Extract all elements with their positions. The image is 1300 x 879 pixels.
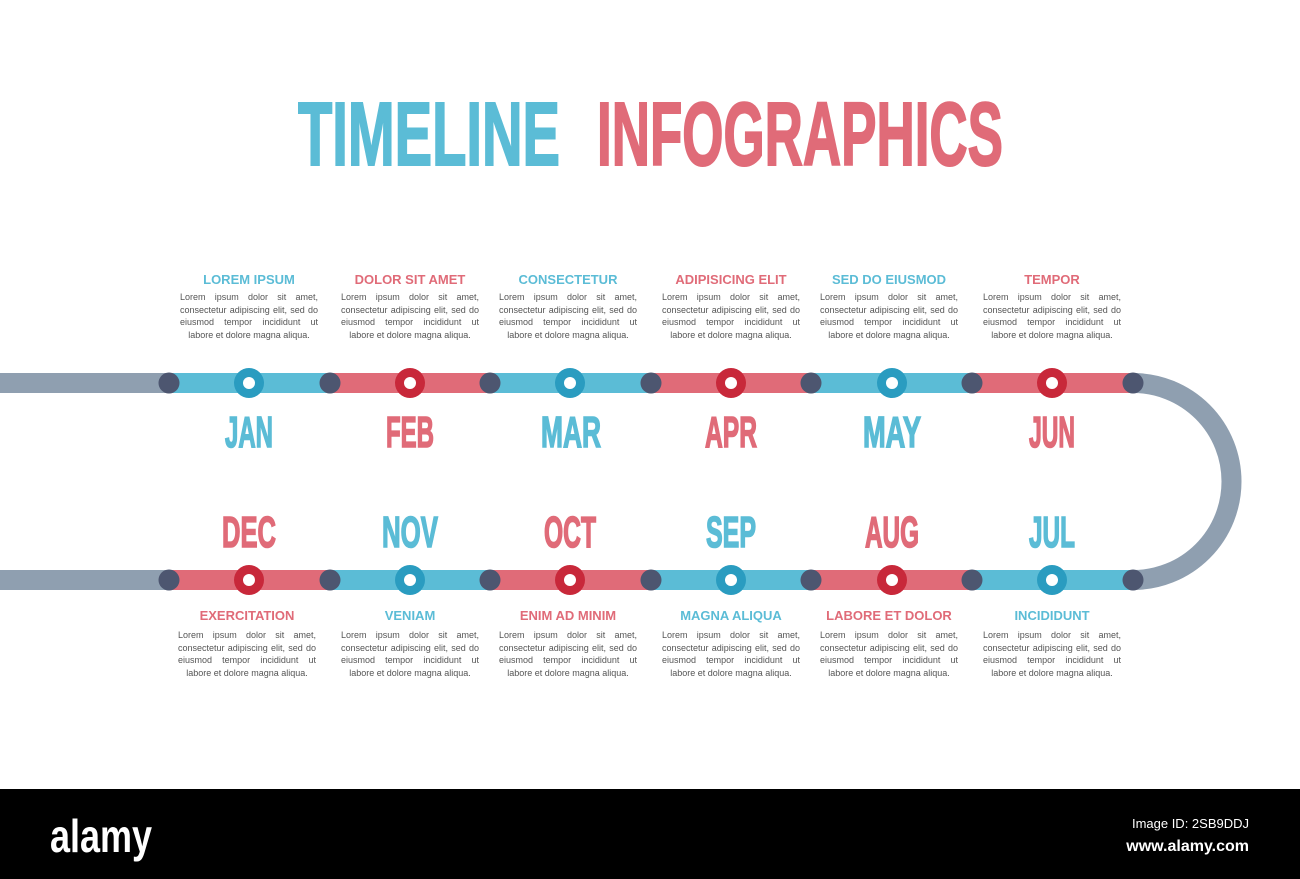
text: TEMPOR <box>1024 272 1080 287</box>
footer bar <box>0 789 1300 879</box>
text: VENIAM <box>385 608 435 623</box>
month labels: OCT <box>544 508 596 557</box>
text: Lorem ipsum dolor sit amet, consectetur adipiscing elit, sed do eiusmod tempor incididunt ut labore et dolore magna aliqua. <box>983 630 1121 678</box>
text: INCIDIDUNT <box>1014 608 1090 623</box>
title: TIMELINE <box>298 85 560 185</box>
text: LABORE ET DOLOR <box>826 608 952 623</box>
text: Lorem ipsum dolor sit amet, consectetur adipiscing elit, sed do eiusmod tempor incididunt ut labore et dolore magna aliqua. <box>180 292 318 340</box>
text: LOREM IPSUM <box>203 272 295 287</box>
top text blocks <box>180 272 1121 340</box>
month labels: AUG <box>865 508 919 557</box>
text: Lorem ipsum dolor sit amet, consectetur adipiscing elit, sed do eiusmod tempor incididunt ut labore et dolore magna aliqua. <box>178 630 316 678</box>
footer id: www.alamy.com <box>1125 838 1249 855</box>
text: EXERCITATION <box>200 608 294 623</box>
month labels: FEB <box>386 408 434 457</box>
text: Lorem ipsum dolor sit amet, consectetur adipiscing elit, sed do eiusmod tempor incididunt ut labore et dolore magna aliqua. <box>662 630 800 678</box>
joint dots <box>158 372 1144 590</box>
text: Lorem ipsum dolor sit amet, consectetur adipiscing elit, sed do eiusmod tempor incididunt ut labore et dolore magna aliqua. <box>499 292 637 340</box>
text: Lorem ipsum dolor sit amet, consectetur adipiscing elit, sed do eiusmod tempor incididunt ut labore et dolore magna aliqua. <box>820 292 958 340</box>
month labels: NOV <box>382 508 438 557</box>
month labels: JUN <box>1029 408 1075 457</box>
footer id <box>1125 816 1249 855</box>
month labels <box>222 408 1075 557</box>
text: SED DO EIUSMOD <box>832 272 946 287</box>
text: Lorem ipsum dolor sit amet, consectetur adipiscing elit, sed do eiusmod tempor incididunt ut labore et dolore magna aliqua. <box>341 630 479 678</box>
text: ADIPISICING ELIT <box>675 272 787 287</box>
text: MAGNA ALIQUA <box>680 608 782 623</box>
footer logo: alamy <box>50 810 152 862</box>
milestone markers <box>234 368 1067 595</box>
text: Lorem ipsum dolor sit amet, consectetur adipiscing elit, sed do eiusmod tempor incididunt ut labore et dolore magna aliqua. <box>820 630 958 678</box>
month labels: DEC <box>222 508 276 557</box>
text: DOLOR SIT AMET <box>355 272 465 287</box>
month labels: JAN <box>225 408 273 457</box>
month labels: JUL <box>1029 508 1075 557</box>
title <box>298 85 1003 185</box>
month labels: MAY <box>863 408 921 457</box>
text: Lorem ipsum dolor sit amet, consectetur adipiscing elit, sed do eiusmod tempor incididunt ut labore et dolore magna aliqua. <box>662 292 800 340</box>
track <box>0 383 1232 580</box>
text: Lorem ipsum dolor sit amet, consectetur adipiscing elit, sed do eiusmod tempor incididunt ut labore et dolore magna aliqua. <box>499 630 637 678</box>
month labels: APR <box>705 408 757 457</box>
text: ENIM AD MINIM <box>520 608 616 623</box>
footer id: Image ID: 2SB9DDJ <box>1132 816 1249 831</box>
title: INFOGRAPHICS <box>597 85 1003 185</box>
text: CONSECTETUR <box>519 272 617 287</box>
month labels: SEP <box>706 508 756 557</box>
text: Lorem ipsum dolor sit amet, consectetur adipiscing elit, sed do eiusmod tempor incididunt ut labore et dolore magna aliqua. <box>341 292 479 340</box>
bottom text blocks <box>178 608 1121 678</box>
month labels: MAR <box>541 408 601 457</box>
text: Lorem ipsum dolor sit amet, consectetur adipiscing elit, sed do eiusmod tempor incididunt ut labore et dolore magna aliqua. <box>983 292 1121 340</box>
